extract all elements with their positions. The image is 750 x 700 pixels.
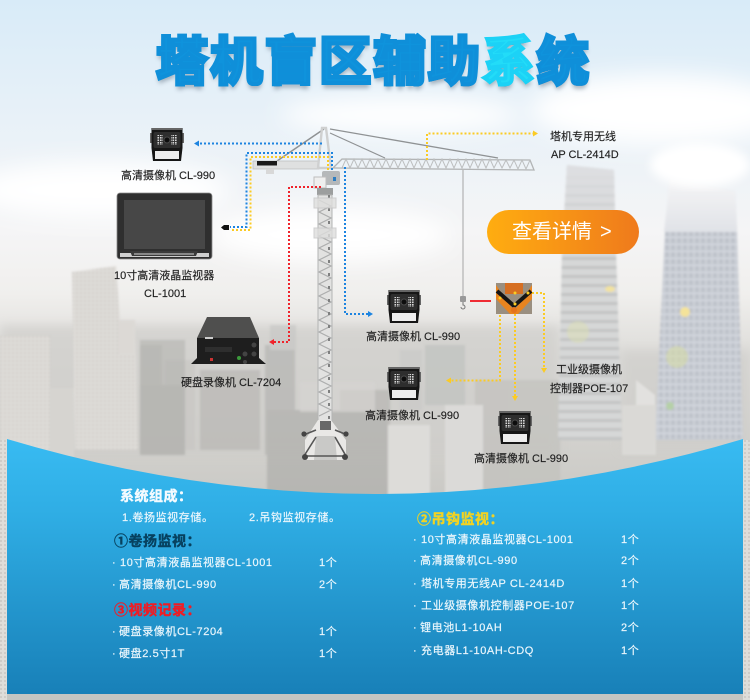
label: lower camera: 高清摄像机 CL-990 <box>365 410 459 422</box>
camera bottom <box>498 411 532 444</box>
list: hook monitoring items: 1个 <box>621 534 639 546</box>
yellow line to AP <box>427 130 538 160</box>
list: hook monitoring items: 1个 <box>621 645 639 657</box>
heading: hoist monitoring: ①卷扬监视： <box>114 533 201 549</box>
list: hook monitoring items: 1个 <box>621 600 639 612</box>
list: video recording items: 1个 <box>319 648 337 660</box>
label: controller: 工业级摄像机 <box>556 364 622 376</box>
red link hook to controller <box>470 300 491 302</box>
mast collars <box>314 198 336 208</box>
list: hook monitoring items: · <box>413 555 417 567</box>
list: hoist monitoring items: · <box>112 579 116 591</box>
heading: system composition: 系统组成： <box>120 488 192 504</box>
blue line to monitor <box>230 153 332 227</box>
blue line to top camera <box>194 140 322 146</box>
button: view details: > <box>600 221 612 243</box>
list: video recording items: 硬盘2.5寸1T <box>119 648 185 660</box>
video recorder <box>191 317 266 364</box>
monitor <box>117 193 212 259</box>
list: video recording items: · <box>112 648 116 660</box>
hook <box>460 296 466 302</box>
list: hoist monitoring items: · <box>112 557 116 569</box>
list: hook monitoring items: · <box>413 645 417 657</box>
camera middle <box>387 290 421 323</box>
list: hook monitoring items: 10寸高清液晶监视器CL-1001 <box>421 534 574 546</box>
label: monitor: 10寸高清液晶监视器 <box>114 270 214 282</box>
label: top camera: 高清摄像机 CL-990 <box>121 170 215 182</box>
text: storage item 1: 1.卷扬监视存储。 <box>122 512 214 524</box>
label: middle camera: 高清摄像机 CL-990 <box>366 331 460 343</box>
label: bottom camera: 高清摄像机 CL-990 <box>474 453 568 465</box>
left buildings <box>0 336 50 456</box>
text: storage item 2: 2.吊钩监视存储。 <box>249 512 341 524</box>
camera lower <box>387 367 421 400</box>
list: hook monitoring items: 2个 <box>621 622 639 634</box>
red line to recorder <box>269 187 321 345</box>
list: hook monitoring items: 1个 <box>621 578 639 590</box>
button: view details: 查看详情 <box>512 221 592 243</box>
crane jib <box>333 159 534 170</box>
list: video recording items: 硬盘录像机CL-7204 <box>119 626 223 638</box>
list: hook monitoring items: 锂电池L1-10AH <box>420 622 502 634</box>
list: hook monitoring items: 工业级摄像机控制器POE-107 <box>421 600 575 612</box>
lower white buildings <box>388 425 430 500</box>
list: hook monitoring items: · <box>413 600 417 612</box>
yellow line to monitor <box>230 157 328 230</box>
list: hoist monitoring items: 2个 <box>319 579 337 591</box>
list: hoist monitoring items: 1个 <box>319 557 337 569</box>
list: hook monitoring items: 2个 <box>621 555 639 567</box>
crane cables <box>277 129 498 296</box>
list: hoist monitoring items: 高清摄像机CL-990 <box>119 579 217 591</box>
list: hook monitoring items <box>413 534 639 657</box>
button: view details <box>487 210 639 254</box>
blue line to middle camera <box>345 167 373 317</box>
crane counter jib <box>253 161 319 169</box>
list: hook monitoring items: · <box>413 534 417 546</box>
low block right <box>636 380 655 440</box>
list: hook monitoring items: 高清摄像机CL-990 <box>420 555 518 567</box>
title: 塔机盲区辅助系统 <box>156 34 591 92</box>
list: hook monitoring items: 充电器L1-10AH-CDQ <box>421 645 534 657</box>
list: video recording items <box>112 626 337 660</box>
label: controller model: 控制器POE-107 <box>550 383 628 395</box>
monitor arrow <box>221 225 229 230</box>
crane base <box>305 420 346 460</box>
label: AP model: AP CL-2414D <box>551 149 619 161</box>
list: hook monitoring items: · <box>413 578 417 590</box>
heading: hook monitoring: ②吊钩监视： <box>417 511 504 527</box>
list: video recording items: 1个 <box>319 626 337 638</box>
label: monitor model: CL-1001 <box>144 288 186 300</box>
yellow line to lower camera <box>446 299 500 384</box>
tower B <box>655 178 743 440</box>
camera top <box>150 128 184 161</box>
list: hoist monitoring items <box>112 556 337 591</box>
camera controller <box>496 283 532 314</box>
label: AP: 塔机专用无线 <box>550 131 616 143</box>
yellow line to bottom camera <box>512 310 518 401</box>
tower A <box>558 165 622 440</box>
list: hook monitoring items: · <box>413 622 417 634</box>
crane cab <box>322 171 340 185</box>
heading: video recording: ③视频记录： <box>114 602 201 618</box>
distant blocks <box>140 325 560 500</box>
label: recorder: 硬盘录像机 CL-7204 <box>181 377 281 389</box>
crane mast <box>318 195 332 421</box>
crane apex <box>318 128 331 168</box>
list: hook monitoring items: 塔机专用无线AP CL-2414D <box>421 578 565 590</box>
yellow line to POE label <box>532 293 547 373</box>
list: hoist monitoring items: 10寸高清液晶监视器CL-1001 <box>120 557 273 569</box>
list: video recording items: · <box>112 626 116 638</box>
